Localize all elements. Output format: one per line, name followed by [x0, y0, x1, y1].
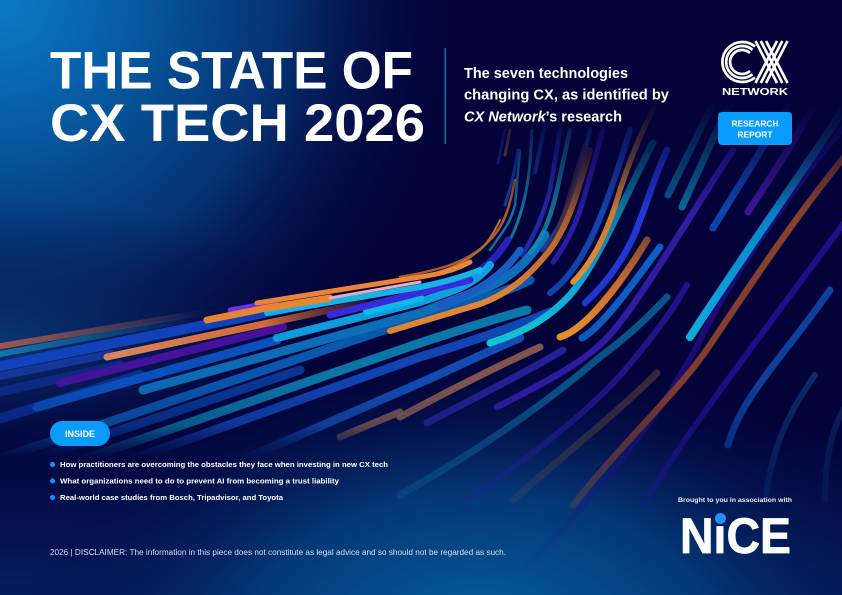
research report badge: REPORT — [738, 130, 773, 140]
far right strands — [396, 125, 842, 529]
subtitle: The seven technologies — [464, 66, 628, 82]
lower left bands — [248, 334, 524, 454]
NICE logo: NiCE — [680, 508, 791, 564]
subtitle: CX Network’s research — [464, 110, 622, 126]
bullet 3: Real-world case studies from Bosch, Tripadvisor, and Toyota — [60, 493, 284, 502]
title — [50, 42, 425, 153]
disclaimer: 2026 | DISCLAIMER: The information in this piece does not constitute as legal advice and so should not be regarded as such. — [50, 548, 506, 557]
divider line — [444, 48, 446, 144]
logo wordmark: NETWORK — [722, 87, 789, 98]
icon: CX monogram — [722, 41, 788, 83]
research report badge — [718, 112, 792, 145]
bullet 2: What organizations need to do to prevent AI from becoming a trust liability — [60, 476, 340, 486]
subtitle: changing CX, as identified by — [464, 88, 669, 104]
inside pill — [50, 421, 110, 446]
inside pill: INSIDE — [65, 429, 95, 439]
CX Network logo — [722, 41, 789, 98]
subtitle — [464, 66, 669, 126]
title: THE STATE OF — [50, 42, 413, 100]
research report badge: RESEARCH — [732, 118, 778, 128]
bullet 1: How practitioners are overcoming the obstacles they face when investing in new CX tech — [60, 460, 389, 469]
light streaks illustration — [0, 108, 842, 529]
sponsor credit: Brought to you in association with — [678, 497, 792, 504]
bright foreground strands — [490, 143, 653, 343]
icon: blue dot — [715, 513, 726, 524]
bullet list — [50, 460, 389, 502]
upper curving strands — [490, 125, 630, 293]
title: CX TECH 2026 — [50, 94, 425, 153]
